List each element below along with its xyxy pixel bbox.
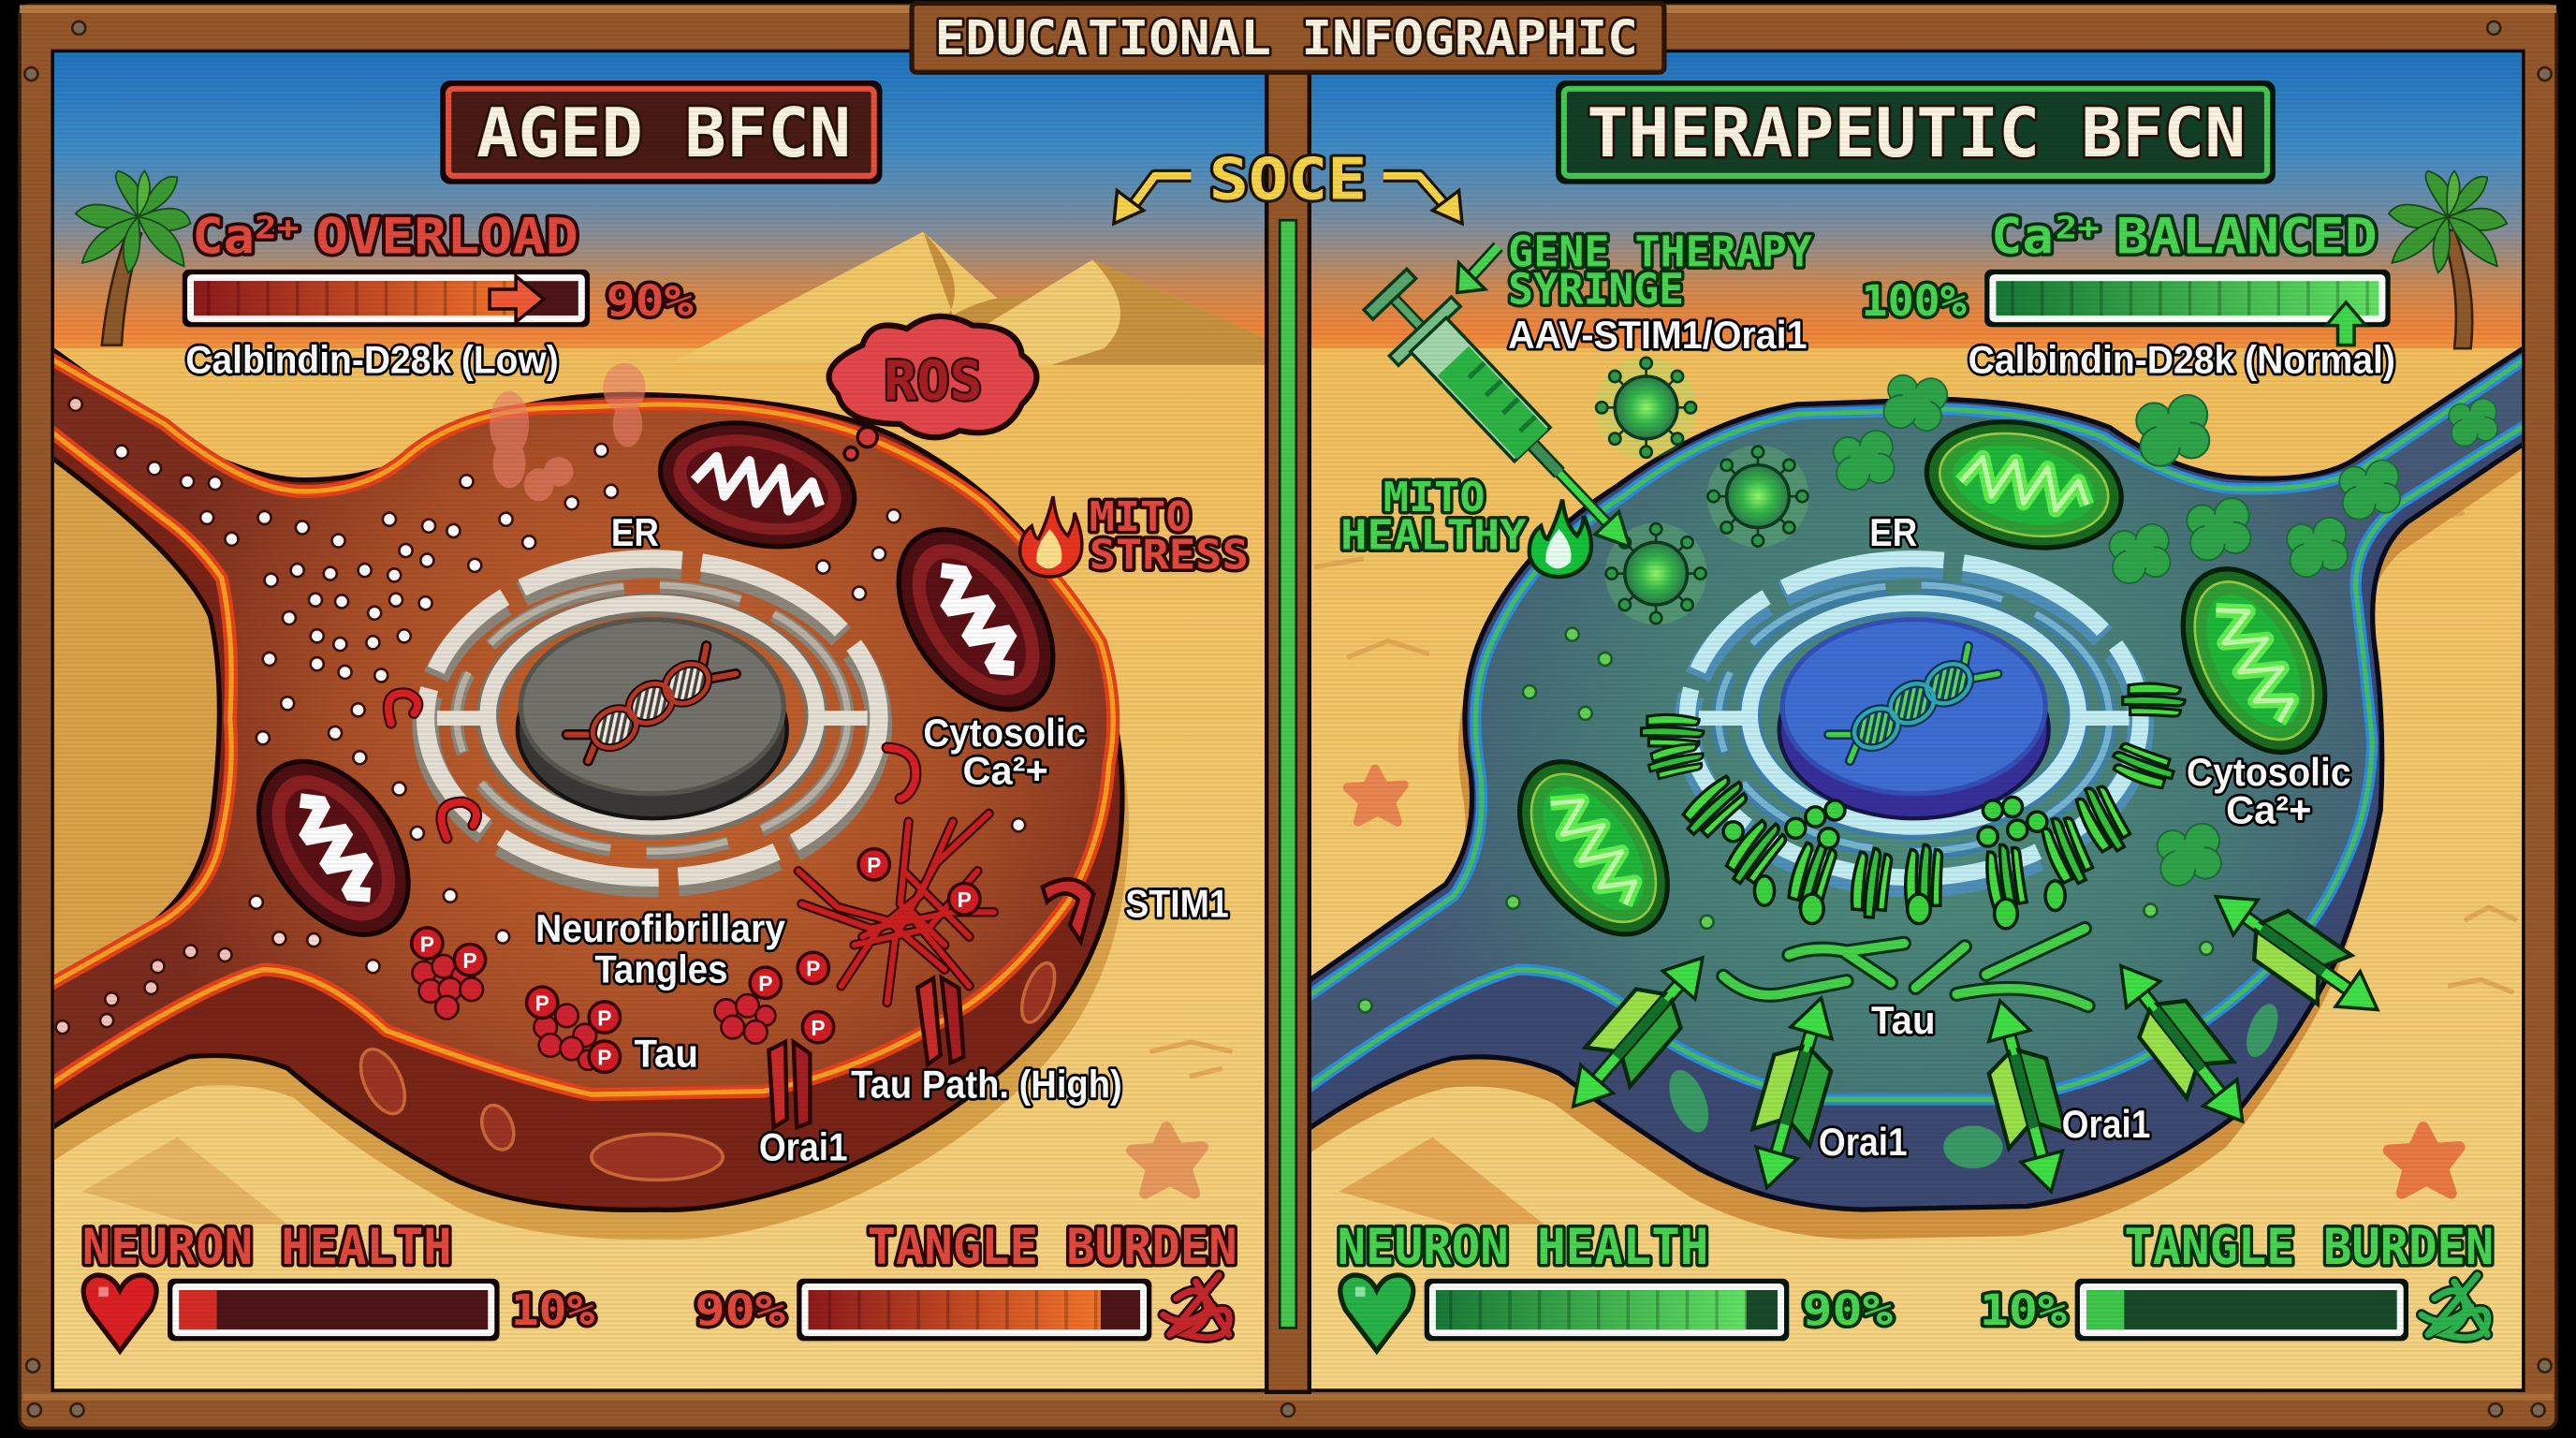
smoke puffs: [490, 363, 646, 501]
viral particles: [1595, 357, 1808, 624]
label: STIM1: STIM1: [1125, 882, 1229, 926]
icon: green tangle: [2422, 1275, 2488, 1338]
value: 100% balanced: 100%: [1862, 276, 1967, 326]
SOCE label with arrows: SOCE: [1209, 146, 1367, 213]
label: gene therapy syringe: GENE THERAPY: [1508, 227, 1812, 276]
label: neurofibrillary tangles: [535, 906, 785, 991]
title plaque: EDUCATIONAL INFOGRAPHIC: [935, 11, 1638, 66]
label: neurofibrillary tangles: Tangles: [594, 947, 728, 991]
label: tau right: Tau: [1871, 998, 1936, 1042]
label: Orai1 left: Orai1: [759, 1124, 848, 1168]
palm tree: left: [76, 171, 191, 345]
dune: right bottom: [1339, 1137, 1544, 1225]
label: mito healthy: HEALTHY: [1340, 511, 1527, 559]
label: ER left: ER: [611, 510, 659, 554]
arrow: syringe pointer: [1457, 246, 1499, 292]
label: tau pathology: Tau Path. (High): [851, 1063, 1122, 1107]
starfish: right lower: [2389, 1127, 2459, 1193]
heading: Ca balanced: 2+: [2056, 210, 2100, 246]
heading: Ca balanced: [1991, 208, 2378, 265]
tau aggregates with phospho markers: [412, 928, 834, 1072]
panel: therapeutic neuron cell: [1283, 335, 2543, 1240]
label: cytosolic Ca right: [2187, 750, 2351, 831]
label: mito healthy: MITO: [1383, 474, 1486, 521]
calcium ions: left: [56, 398, 1025, 1034]
channel: Orai1 red right: [917, 976, 964, 1064]
mitochondrion: right lower: [1489, 735, 1698, 961]
label: mito stress: MITO: [1090, 493, 1191, 541]
label: neurofibrillary tangles: Neurofibrillary: [535, 906, 785, 950]
dna helix: left: [567, 646, 736, 761]
heading box: aged BFCN: AGED BFCN: [476, 94, 851, 172]
nucleus: left: [518, 620, 787, 818]
value: 10% health: 10%: [511, 1285, 595, 1335]
central divider: [1266, 72, 1310, 1392]
value: 90% overload: 90%: [607, 276, 694, 326]
ROS cloud: ROS: [884, 349, 983, 413]
bar: neuron health 90%: [1425, 1279, 1789, 1341]
bar: tangle burden 10%: [2075, 1279, 2408, 1341]
ER-bound STIM1 clusters: [1642, 683, 2185, 929]
channel: STIM1 red: [1032, 873, 1096, 942]
icon: green heart: [1340, 1275, 1413, 1351]
icon: red heart: [83, 1275, 156, 1351]
dune: left bottom: [82, 1137, 287, 1225]
endoplasmic reticulum: right: [1687, 559, 2141, 884]
ROS cloud: [829, 316, 1036, 461]
heading: tangle burden therapeutic: TANGLE BURDEN: [2124, 1219, 2494, 1276]
label: ER right: ER: [1869, 510, 1917, 554]
dna helix: right: [1828, 646, 1998, 761]
heading: Ca overload: Ca: [192, 208, 255, 265]
tau filaments: right: [1723, 929, 2088, 1005]
heading: neuron health therapeutic: NEURON HEALTH: [1338, 1219, 1708, 1276]
hook markers: calcium transport: [388, 693, 915, 838]
endoplasmic reticulum: left: [426, 559, 879, 884]
starfish: left: [1132, 1127, 1203, 1193]
vesicles in lower wall: [352, 959, 1061, 1180]
label: mito stress: [1090, 493, 1249, 579]
label: Calbindin low: Calbindin-D28k (Low): [185, 337, 559, 381]
label: cytosolic Ca right: Cytosolic: [2187, 750, 2351, 794]
mitochondrion: right top: [1915, 404, 2133, 565]
label: Calbindin normal: Calbindin-D28k (Normal): [1969, 337, 2395, 381]
label: mito stress: STRESS: [1090, 531, 1249, 579]
palm tree: right: [2389, 171, 2507, 348]
label: tau left: Tau: [634, 1031, 698, 1075]
neurofibrillary tangle: [798, 814, 994, 1003]
bar: tangle burden 90%: [797, 1279, 1151, 1341]
heading: tangle burden aged: TANGLE BURDEN: [868, 1219, 1237, 1276]
bar: Ca balanced 100%: [1984, 270, 2391, 345]
panel: aged neuron cell: [33, 335, 1129, 1240]
heading: Ca balanced: BALANCED: [2116, 208, 2378, 265]
label: mito healthy: [1340, 474, 1527, 559]
heading: Ca overload: 2+: [255, 210, 299, 246]
label: AAV vector: AAV-STIM1/Orai1: [1508, 313, 1808, 357]
label: cytosolic Ca right: Ca²+: [2226, 787, 2311, 831]
heading: neuron health aged: NEURON HEALTH: [82, 1219, 452, 1276]
icon: flame red: [1020, 496, 1082, 577]
calcium ions: right: [1358, 628, 2213, 1012]
label: Orai1 right second: Orai1: [2062, 1102, 2150, 1146]
channel: Orai1 red lower: [768, 1042, 810, 1127]
starfish: right upper: [1348, 770, 1404, 822]
mitochondrion: left right: [867, 502, 1085, 738]
SOCE label with arrows: [1114, 146, 1462, 224]
icon: gene therapy syringe: [1354, 260, 1661, 577]
mitochondrion: left top: [648, 405, 867, 565]
icon: flame green: [1530, 500, 1591, 577]
icon: red tangle: [1164, 1275, 1229, 1338]
Orai1 channels with calcium arrows: [1551, 873, 2394, 1199]
heading: Ca overload: OVERLOAD: [315, 208, 578, 265]
mitochondrion: right side: [2154, 545, 2354, 776]
label: cytosolic Ca left: [923, 711, 1086, 792]
value: 90% tangles: 90%: [695, 1285, 786, 1335]
label: cytosolic Ca left: Cytosolic: [923, 711, 1086, 755]
vesicles in lower wall: [1661, 1000, 2284, 1168]
mitochondrion: left lower: [228, 734, 439, 962]
heading box: therapeutic BFCN: THERAPEUTIC BFCN: [1587, 94, 2246, 172]
label: cytosolic Ca left: Ca²+: [962, 748, 1048, 792]
label: Orai1 right first: Orai1: [1819, 1120, 1908, 1164]
value: 90% health: 90%: [1802, 1285, 1893, 1335]
heading: Ca balanced: Ca: [1991, 208, 2054, 265]
green protein clusters: [1834, 365, 2497, 886]
bar: neuron health 10%: [168, 1279, 500, 1341]
label: gene therapy syringe: [1508, 227, 1812, 315]
heading: Ca overload: [192, 208, 578, 265]
label: gene therapy syringe: SYRINGE: [1508, 265, 1684, 315]
value: 10% tangles: 10%: [1980, 1285, 2068, 1335]
bar: Ca overload 90%: [183, 270, 590, 327]
nucleus: right: [1779, 620, 2049, 818]
